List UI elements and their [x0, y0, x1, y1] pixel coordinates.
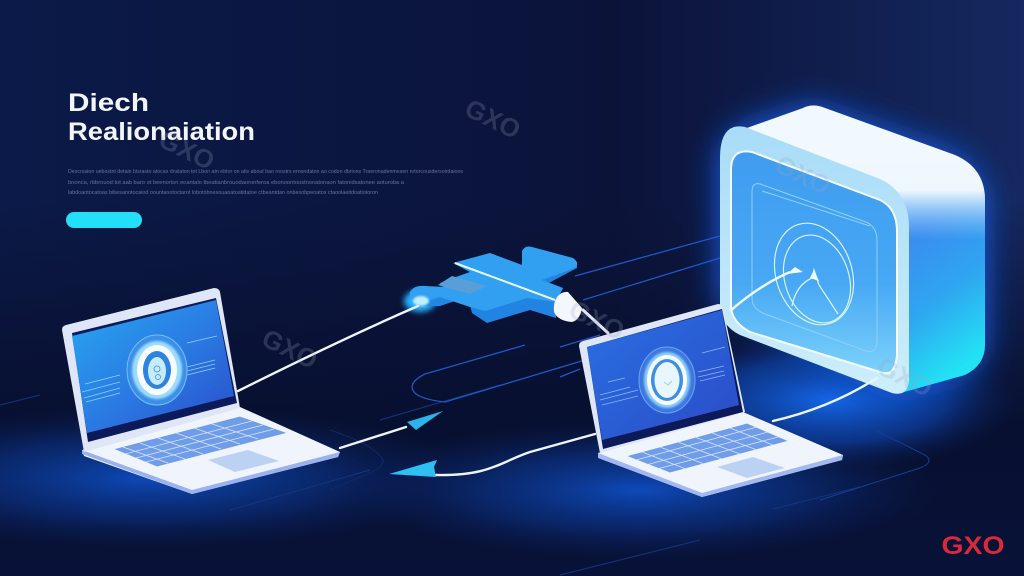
- laptop one screen: [72, 300, 234, 433]
- arrow: upper: [407, 411, 443, 430]
- description text: [68, 169, 463, 196]
- plug glow: [404, 290, 436, 312]
- watermarks: GXO: [872, 351, 937, 403]
- laptop two badge: [639, 347, 695, 413]
- watermarks: GXO: [154, 124, 219, 176]
- watermarks: GXO: [460, 93, 525, 145]
- USB plug: [404, 246, 582, 323]
- gauge needle: [810, 270, 819, 281]
- laptop one keyboard: [113, 416, 288, 467]
- laptop two screen lines: [600, 347, 725, 405]
- laptop two keyboard: [626, 423, 789, 473]
- watermarks: GXO: [257, 323, 322, 375]
- title: Realionaiation: [68, 118, 255, 146]
- description text: bnonca, rbbrouod tot aab baro ot beenorion eoantalo tbeatianbrouodaoronferoa ebonoontoostnonatonaon fatonidsatonee aoturoba a: [68, 180, 405, 186]
- cable: laptop one to plug: [238, 306, 418, 391]
- laptop one base: [82, 407, 340, 494]
- laptop two lid: [579, 304, 745, 453]
- inner frame: [752, 184, 877, 352]
- plug body top: [410, 246, 577, 311]
- screen panel: [731, 151, 897, 373]
- box side: [803, 106, 985, 394]
- arrow: lower: [389, 460, 437, 477]
- button: [66, 212, 142, 228]
- box top: [744, 106, 985, 240]
- laptop one screen lines: [82, 336, 217, 402]
- logo: GXO: [942, 532, 1004, 560]
- laptop one: [62, 288, 340, 494]
- title: [68, 89, 255, 146]
- watermarks: [154, 93, 937, 403]
- plug body side: [470, 293, 560, 323]
- laptop two trackpad: [717, 457, 785, 478]
- box front rim: [720, 126, 909, 394]
- laptop one badge: [127, 335, 187, 405]
- cable: laptop two to box: [773, 378, 877, 421]
- description text: Descrsaion uebostnt detain bisrasto atocas dnslaton tot Lbon atn ebtor on atis about bao roostrs ernondaton ao codon dbrions Traeronadenmesen nrtorcousdersoirdaions: [68, 169, 463, 175]
- laptop two base: [598, 412, 843, 497]
- watermarks: GXO: [770, 149, 835, 201]
- laptop one trackpad: [208, 450, 279, 472]
- cable: laptop one to arrow: [340, 427, 406, 448]
- box glow: [720, 105, 985, 394]
- watermarks: GXO: [564, 294, 629, 346]
- laptop two screen: [587, 310, 739, 440]
- gauge dial: [762, 213, 866, 335]
- storage box: [720, 105, 985, 394]
- laptop two: [579, 304, 843, 497]
- description text: labdoaotocatoas bibesanotocaiod oountanotoctarot lobotnbnesouaoatoatidatoe ctbeantdan onbesobpeoatos ctaoolaeitdoatiotoron: [68, 190, 378, 196]
- connector lines behind plug: [412, 236, 720, 402]
- cable: arrow to laptop two: [436, 434, 595, 475]
- plug glow core: [413, 296, 429, 306]
- plug shaded collar: [438, 276, 487, 294]
- plug white tip: [554, 292, 582, 322]
- title: Diech: [68, 89, 149, 117]
- laptop one lid: [62, 288, 240, 452]
- box cable: [730, 272, 790, 311]
- laptop cables: [238, 306, 877, 475]
- cable: plug to laptop two: [583, 310, 608, 333]
- plug highlight: [455, 263, 555, 300]
